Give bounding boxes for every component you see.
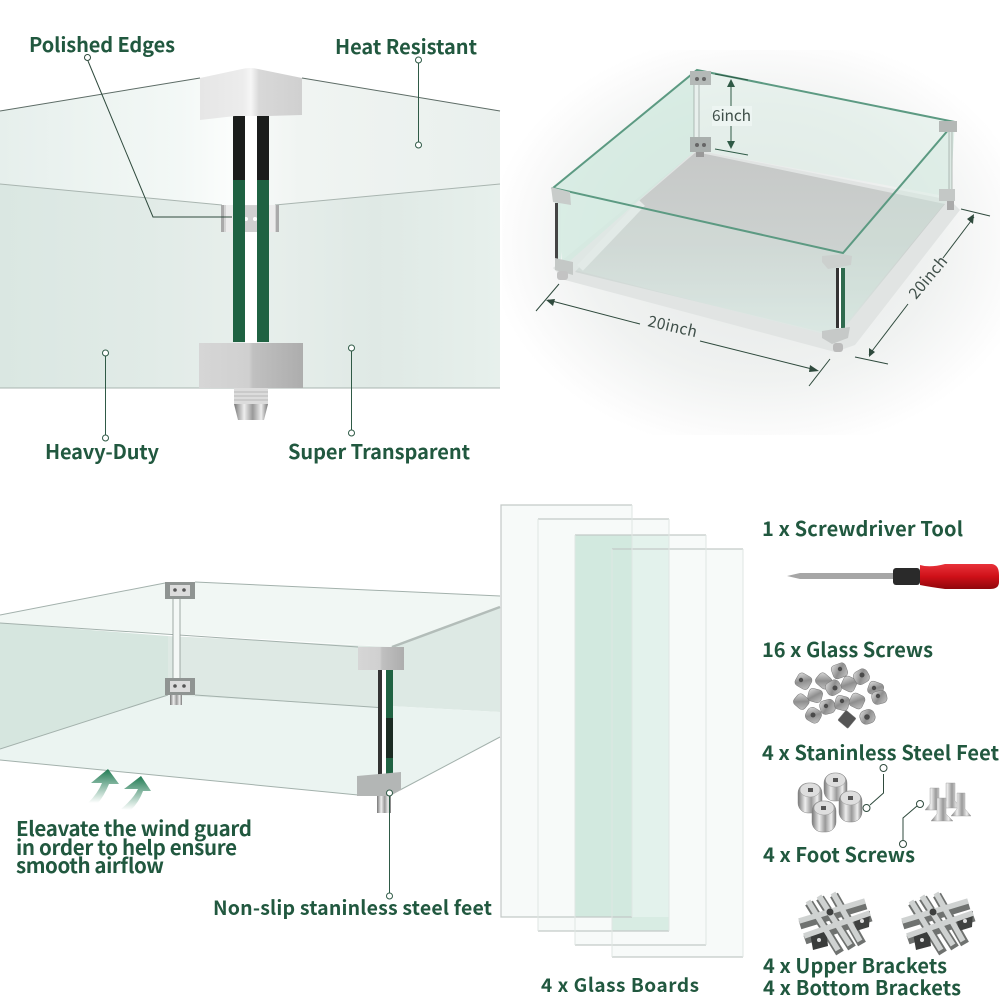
left glass pane [553,70,697,267]
dimension: 20 inch side: 20inch [903,251,952,303]
floor glass [0,695,393,795]
lower white bracket [199,343,303,388]
small middle bracket [221,205,279,232]
plate edge seen through glass [580,203,642,268]
text block: airflow note: Eleavate the wind guard [16,812,252,842]
front lower bracket [357,772,401,796]
lower left wall [0,623,168,749]
heading: Polished Edges: Polished Edges [29,29,175,58]
dimension: 6 inch [712,74,752,155]
icon: steel feet [798,773,862,832]
front glass pane [553,188,843,337]
back glass pane [696,70,955,197]
glass board 3 [575,535,706,945]
text block: airflow note: smooth airflow [16,849,164,879]
glass board 1 [501,505,632,917]
dimension: 6 inch: 6inch [712,104,751,126]
dimension: 20 inch front [536,284,830,386]
label: 1 x Screwdriver Tool: 1 x Screwdriver Tool [762,513,963,542]
icon: glass screws [792,662,888,728]
upper glass pane [0,78,500,205]
dimension: 20 inch side [855,209,990,364]
label: 4 x Staninless Steel Feet: 4 x Staninless Steel Feet [762,737,1000,766]
floor plate [553,150,960,352]
heading: Heavy-Duty: Heavy-Duty [45,436,160,465]
back-right post [939,121,957,210]
heading: Heat Resistant: Heat Resistant [335,31,478,60]
dimension: 20 inch front: 20inch [646,309,700,342]
lighter overlap strip [632,535,669,931]
inner floor [575,152,945,336]
bottom green corner [612,917,669,931]
right side pane upper [390,608,500,712]
label: 4 x Glass Boards: 4 x Glass Boards [541,971,699,998]
right glass edge bar [257,115,269,342]
glass edge lines [0,78,500,111]
front-left post [551,187,573,280]
thick right top edge [392,607,500,647]
upper white bracket [200,68,302,120]
callout line: Heat Resistant [416,57,422,148]
glass board 4 [612,549,743,957]
front foot [377,796,391,813]
front upper bracket [358,647,404,670]
front post glass edges [378,670,393,775]
label: 16 x Glass Screws: 16 x Glass Screws [762,634,933,663]
threaded foot [234,388,268,420]
callout line: foot screws [900,800,924,848]
left glass edge bar [233,115,245,342]
heading: Super Transparent: Super Transparent [288,436,471,465]
text block: airflow note [16,812,252,879]
panel: assembled wind guard with dimensions [502,50,1000,435]
icon: bracket right [902,893,974,953]
white gap between glass edges [245,116,257,343]
icon: bracket left [799,893,871,953]
glass board 2 [538,519,669,931]
panel: elevated wind guard [0,582,500,813]
icon: foot screws [925,783,971,821]
callout line: steel feet [386,790,392,899]
green overlap strip [575,535,632,917]
background shadow [502,50,1000,435]
front-right post [822,254,852,352]
glass edges [0,582,500,795]
back post with brackets [165,582,195,705]
lower glass pane [0,184,500,388]
label: Non-slip staninless steel feet: Non-slip staninless steel feet [213,892,492,921]
board outlines [501,505,743,957]
panel: glass boards [501,505,743,957]
upper back pane [0,582,500,647]
label: 4 x Upper Brackets: 4 x Upper Brackets [763,950,947,979]
panel: glass corner close-up [0,68,500,420]
text block: airflow note: in order to help ensure [16,831,237,861]
callout line: steel feet [863,764,887,812]
top green glass edges [553,70,955,253]
icon: screwdriver [787,564,999,589]
back-left post [690,71,711,157]
back wall lower band [168,636,390,708]
right glass pane [835,122,955,337]
callout line: Polished Edges [84,54,232,217]
label: 4 x Foot Screws: 4 x Foot Screws [763,839,915,868]
right side pane lower [390,706,500,790]
callout line: Heavy-Duty [102,350,108,441]
callout line: Super Transparent [348,345,354,436]
airflow arrows [88,769,151,810]
